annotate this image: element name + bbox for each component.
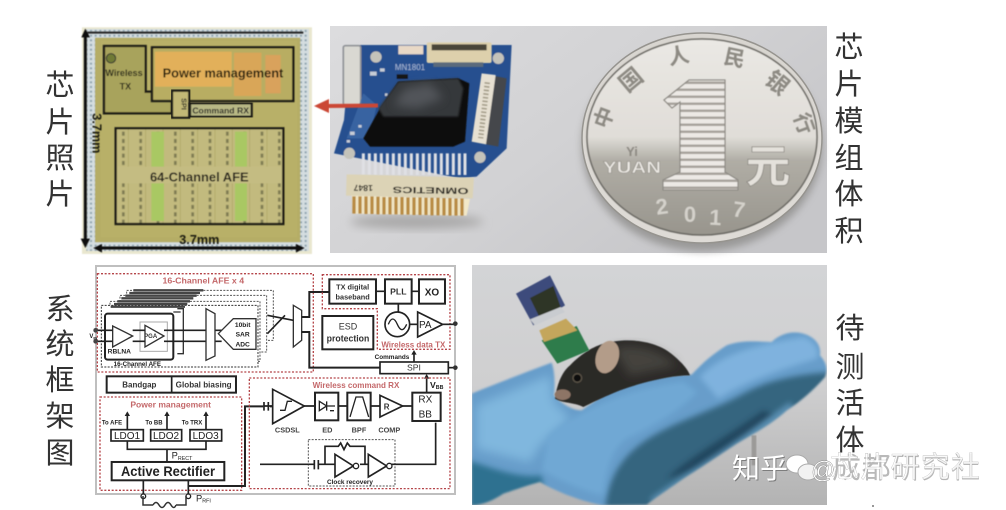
side label: module volume: 组 [834, 142, 864, 175]
arrow: chip to module [314, 99, 378, 113]
64-channel AFE block: 64-Channel AFE [150, 169, 249, 184]
side label: system block diagram: 架 [45, 401, 75, 433]
coin lettering: 7 [731, 196, 747, 223]
pin row [363, 153, 465, 175]
bandgap and biasing: Bandgap [122, 380, 157, 389]
coin lettering: 人 [667, 43, 691, 70]
wireless data TX region: TX digital [336, 283, 369, 292]
head-mounted implant [516, 275, 589, 364]
side label: chip photo: 片 [45, 106, 75, 139]
wireless command RX region: BB [419, 409, 432, 420]
bandgap and biasing [107, 376, 236, 393]
power management region: LDO2 [153, 431, 179, 442]
module board: MN1801 [395, 63, 426, 72]
black epoxy blob [363, 78, 469, 147]
bandgap and biasing: Global biasing [176, 380, 232, 389]
photo: mouse on gloved hand [463, 265, 833, 510]
watermark: @ [811, 457, 835, 484]
SPI block: BB [436, 385, 444, 391]
side label: live test subject: 待 [835, 312, 865, 345]
command RX block [190, 103, 252, 117]
coin lettering: 国 [614, 63, 648, 97]
power management region: Power management [130, 399, 211, 409]
connector top [427, 42, 492, 67]
side label: module volume: 片 [834, 68, 864, 101]
dimension arrow: chip height: 3.7mm [90, 113, 104, 153]
panel: module and coin photo background [330, 26, 827, 253]
wireless command RX region: ED [322, 426, 332, 435]
TX data path [267, 291, 419, 368]
SPI block [375, 350, 458, 393]
dimension arrow: chip width [93, 233, 305, 253]
watermark: 知乎 [732, 453, 788, 484]
SPI block: SPI [180, 98, 189, 110]
SPI block [172, 91, 189, 118]
power management region: RECT [178, 456, 193, 462]
16-channel AFE region: 10bit [235, 322, 251, 329]
panel: system block diagram [89, 266, 458, 508]
ESD protection: ESD [339, 322, 358, 332]
Omnetics connector: OMNETICS [393, 185, 469, 196]
power management region: P [196, 493, 202, 503]
wireless command RX region: CSDSL [275, 426, 300, 435]
wireless data TX region: baseband [336, 292, 370, 301]
panel: chip photo [81, 27, 312, 254]
side label: module volume: 模 [834, 105, 864, 138]
clock recovery: Clock recovery [327, 479, 373, 486]
side label: system block diagram: 图 [45, 438, 75, 470]
power management region [100, 397, 273, 505]
watermark: 芯片研究社 [830, 451, 980, 484]
coin lettering: YUAN [603, 158, 661, 177]
side label: live test subject: 测 [835, 351, 865, 384]
ESD protection [322, 316, 373, 349]
power management region: LDO1 [114, 431, 140, 442]
coin numeral 1 [663, 80, 738, 190]
power management region: Active Rectifier [121, 464, 216, 479]
16-channel AFE region: 16-Channel AFE [114, 361, 162, 368]
power management block [152, 47, 293, 101]
16-channel AFE region: SAR [236, 332, 250, 339]
power management region: To AFE [102, 421, 122, 427]
side label: module volume: 积 [834, 216, 864, 248]
coin lettering: 0 [684, 202, 696, 227]
coin lettering [590, 43, 818, 230]
side label: system block diagram: 系 [45, 293, 75, 326]
power management region: To TRX [182, 421, 202, 427]
wireless command RX region: RX [418, 395, 433, 406]
SPI block: V [430, 380, 436, 390]
wireless data TX region: XO [425, 287, 439, 298]
Omnetics connector: 1847 [353, 183, 373, 193]
SPI block: Commands [375, 355, 410, 361]
16-channel AFE region [93, 274, 313, 372]
wireless command RX region: R [384, 402, 390, 411]
input label: V [89, 334, 93, 340]
coin lettering: 银 [760, 66, 794, 100]
side label: live test subject: 活 [835, 387, 865, 420]
clock recovery [260, 423, 436, 486]
side label: system block diagram: 统 [45, 328, 75, 361]
side label: system block diagram [45, 293, 75, 470]
power management region: RFI [202, 499, 211, 505]
photo: chip module [334, 42, 512, 229]
wireless command RX region [249, 378, 450, 489]
side label: chip photo [45, 69, 75, 211]
side label: system block diagram: 框 [45, 364, 75, 397]
side label: chip photo: 芯 [45, 69, 75, 102]
16-channel AFE region: ADC [235, 341, 250, 348]
coin lettering: Yi [626, 144, 638, 159]
connector right [472, 73, 507, 147]
coin lettering: 元 [745, 141, 791, 192]
dimension arrow: chip height [81, 29, 303, 248]
wireless data TX region: PA [419, 320, 432, 331]
side label: module volume: 芯 [834, 31, 864, 64]
wireless TX block: TX [120, 81, 131, 91]
coin lettering: 1 [709, 205, 722, 230]
wireless data TX region: Wireless data TX [381, 340, 446, 350]
wireless command RX region: BPF [352, 426, 367, 435]
photo: one yuan coin [582, 33, 822, 251]
Omnetics connector [346, 174, 474, 216]
dimension arrow: chip width: 3.7mm [179, 233, 219, 247]
watermark [732, 451, 980, 485]
side label: live test subject [835, 312, 865, 457]
SPI block: SPI [407, 363, 421, 373]
coin lettering: 中 [590, 104, 619, 132]
RF input inductor [143, 496, 186, 508]
small speck [872, 505, 874, 507]
wireless TX block [104, 46, 172, 113]
power management region: LDO3 [193, 431, 219, 442]
side label: chip photo: 照 [45, 143, 75, 175]
16-channel AFE region: 16-Channel AFE x 4 [162, 276, 244, 286]
side label: module volume: 体 [834, 178, 864, 211]
power management region: P [172, 451, 178, 461]
watermark: 成都研究社 [832, 452, 980, 485]
power management region: To BB [145, 421, 163, 427]
mouse [555, 338, 690, 407]
16-channel AFE region: RBLNA [108, 349, 131, 356]
glove [463, 329, 833, 510]
side label: live test subject: 体 [835, 424, 865, 457]
wireless data TX region [322, 275, 458, 350]
module board [334, 45, 512, 178]
command RX block: Command RX [192, 105, 249, 115]
wireless command RX region: COMP [378, 426, 400, 435]
needle shadow [752, 435, 756, 465]
coin lettering: 2 [654, 193, 670, 220]
wireless data TX region: PLL [390, 287, 407, 297]
side label: module volume [834, 31, 864, 248]
coin lettering: 行 [789, 110, 818, 138]
wireless TX block: Wireless [105, 68, 143, 78]
input label: IN [93, 335, 97, 340]
16-channel AFE region: PGA [144, 334, 158, 340]
side label: chip photo: 片 [45, 178, 75, 211]
coin lettering: 民 [722, 45, 747, 72]
power management block: Power management [163, 65, 284, 80]
64-channel AFE block [116, 128, 283, 224]
ESD protection: protection [327, 333, 369, 343]
watermark: 知乎 [733, 454, 789, 485]
wireless command RX region: Wireless command RX [313, 380, 400, 390]
